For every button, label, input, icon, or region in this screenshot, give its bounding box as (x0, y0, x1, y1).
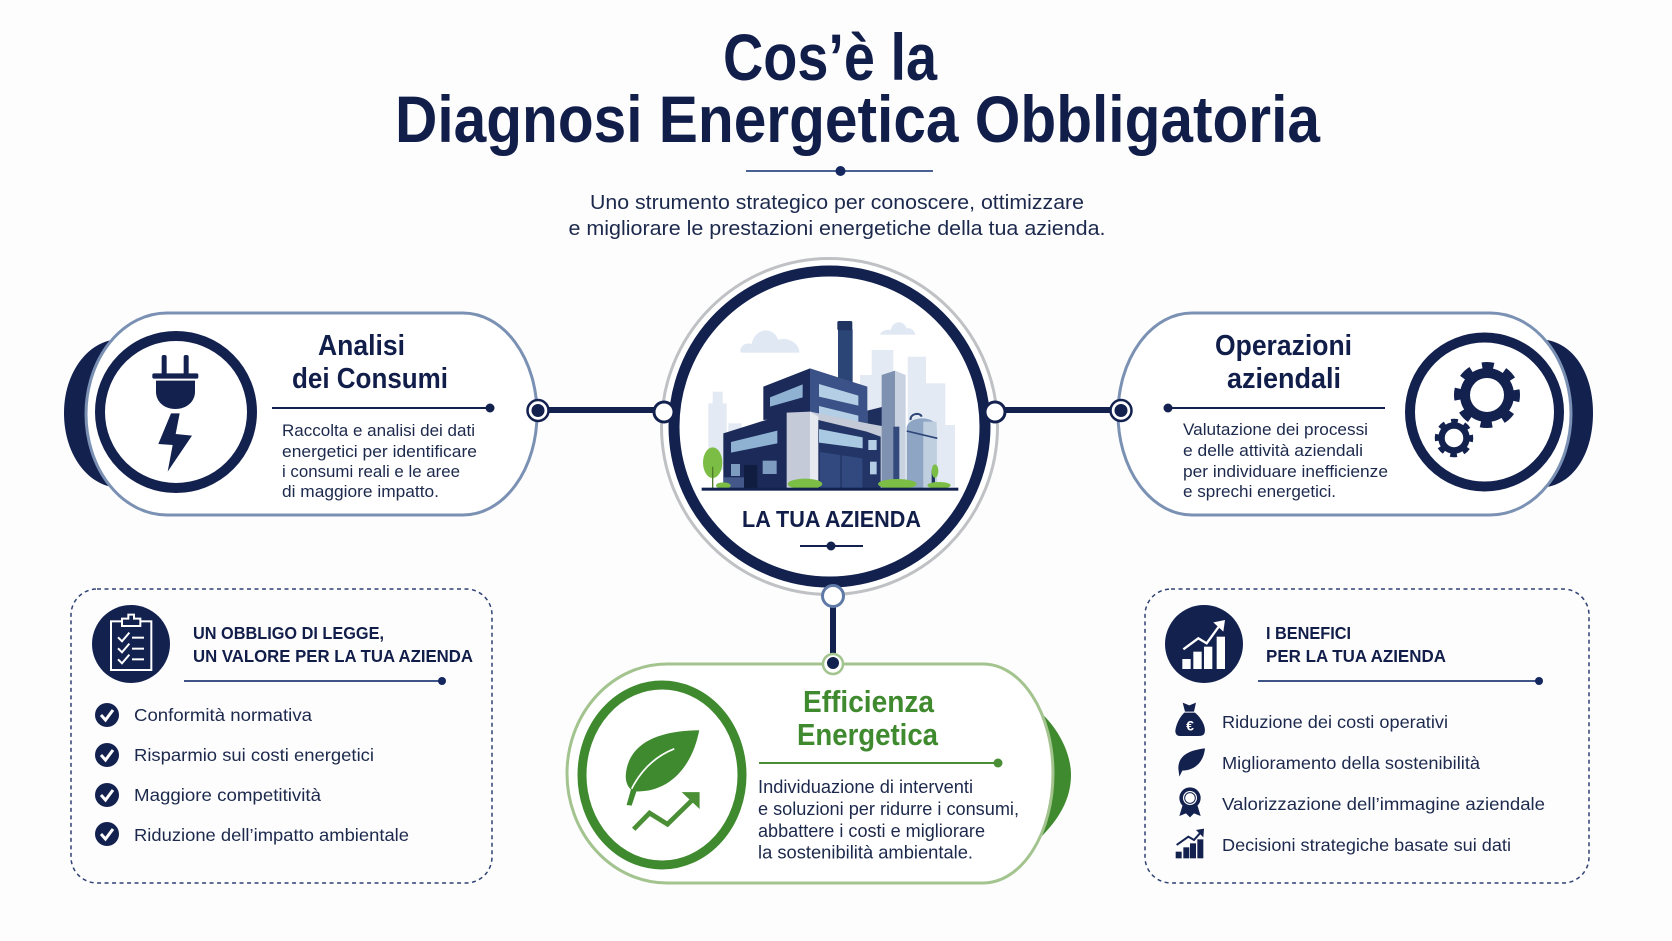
navy ring (674, 271, 985, 582)
list item: Impatto ambientale: Riduzione dell’impatto ambientale (134, 825, 409, 845)
panel: Operazioni aziendali (1118, 313, 1593, 515)
list item: immagine aziendale: Valorizzazione dell’immagine aziendale (1222, 794, 1545, 814)
title: Cos’è la (723, 20, 938, 94)
right crescent (1040, 712, 1071, 838)
greenery (703, 447, 951, 489)
panel heading: PER LA TUA AZIENDA (1266, 646, 1446, 666)
node: right pill connector (1110, 400, 1132, 421)
list item: costi operativi: € (1186, 717, 1194, 733)
list item: Impatto ambientale (95, 822, 409, 846)
panel: Analisi dei Consumi: dei Consumi (292, 363, 448, 395)
pill outline (567, 664, 1053, 883)
node: left pill connector (528, 400, 548, 421)
title divider (746, 166, 933, 176)
list item: costi operativi: Riduzione dei costi operativi (1222, 712, 1448, 732)
icon: leaf and growth arrow (626, 730, 700, 829)
node: top of green pill (823, 654, 843, 674)
list item: Risparmio: Risparmio sui costi energetici (134, 745, 374, 765)
lower left block (723, 413, 787, 488)
pill outline (86, 313, 537, 515)
connector lines (538, 410, 1120, 664)
dashed frame (71, 589, 492, 883)
body text: di maggiore impatto. (282, 483, 439, 501)
clouds (740, 322, 915, 353)
heading: Operazioni (1215, 330, 1352, 362)
back pipe block (867, 407, 883, 488)
body text: e soluzioni per ridurre i consumi, (758, 799, 1019, 819)
node: left of circle (654, 402, 674, 422)
panel heading (193, 623, 473, 666)
body text (758, 777, 1019, 862)
left crescent (64, 340, 112, 487)
icon: clipboard (92, 605, 170, 683)
list item: decisioni strategiche (1176, 829, 1511, 858)
dashed frame (1145, 589, 1589, 883)
body text: per individuare inefficienze (1183, 463, 1388, 481)
subtitle: Uno strumento strategico per conoscere, ottimizzare (590, 191, 1084, 214)
node: bottom of circle (822, 586, 844, 606)
illustration: factory (702, 321, 958, 491)
panel: Efficienza Energetica: Energetica (797, 717, 939, 752)
list item: Conformità normativa (95, 703, 312, 727)
body text (282, 422, 477, 501)
body text: e delle attività aziendali (1183, 442, 1363, 460)
right crescent (1547, 340, 1593, 487)
list item: sostenibilità: Miglioramento della sostenibilità (1222, 753, 1480, 773)
grey front block (787, 412, 889, 488)
ring (1410, 338, 1559, 486)
icon: plug and lightning (152, 355, 198, 472)
icon: growth chart (1165, 605, 1243, 683)
panel: Un obbligo di legge (71, 589, 492, 883)
heading: Analisi (318, 330, 405, 362)
title: Diagnosi Energetica Obbligatoria (395, 82, 1321, 156)
panel heading: I BENEFICI (1266, 623, 1351, 643)
list item: Competitività (95, 783, 321, 807)
tower (882, 371, 895, 488)
outer grey ring (662, 258, 998, 594)
title (395, 20, 1321, 156)
central circle: La tua azienda (662, 258, 998, 594)
heading rule (759, 758, 1002, 768)
node: right of circle (985, 402, 1005, 422)
panel heading (1266, 623, 1446, 666)
heading rule (1258, 677, 1543, 685)
list item: Conformità normativa: Conformità normativa (134, 705, 312, 725)
panel: Analisi dei Consumi (64, 313, 537, 515)
body text (1183, 421, 1388, 501)
pill outline (1118, 313, 1571, 515)
subtitle: e migliorare le prestazioni energetiche della tua azienda. (568, 217, 1106, 240)
heading rule (272, 404, 494, 412)
list item: decisioni strategiche: Decisioni strategiche basate sui dati (1222, 835, 1511, 855)
list item: Risparmio (95, 743, 374, 767)
heading rule (184, 677, 446, 685)
list item: Competitività: Maggiore competitività (134, 785, 321, 805)
ring (100, 336, 252, 488)
body text: Valutazione dei processi (1183, 421, 1368, 439)
body text: Raccolta e analisi dei dati (282, 422, 475, 440)
panel heading: UN OBBLIGO DI LEGGE, (193, 623, 384, 643)
rolling door (820, 452, 862, 488)
body text: la sostenibilità ambientale. (758, 842, 973, 862)
tank (907, 418, 937, 488)
ground line (702, 488, 958, 491)
panel: Efficienza Energetica (567, 664, 1071, 883)
body text: energetici per identificare (282, 443, 477, 461)
list item: costi operativi (1175, 703, 1448, 736)
icon: gears (1434, 361, 1521, 458)
skyline (708, 350, 955, 487)
chimney (838, 329, 853, 383)
subtitle (568, 191, 1106, 240)
center divider (800, 542, 863, 550)
panel: I benefici (1145, 589, 1589, 883)
panel heading: UN VALORE PER LA TUA AZIENDA (193, 646, 473, 666)
body text: e sprechi energetici. (1183, 483, 1336, 501)
list item: immagine aziendale (1179, 787, 1545, 817)
center label: LA TUA AZIENDA (742, 506, 921, 532)
body text: i consumi reali e le aree (282, 463, 460, 481)
panel: Operazioni aziendali: aziendali (1227, 363, 1341, 395)
body text: Individuazione di interventi (758, 777, 973, 797)
list item: sostenibilità (1178, 748, 1480, 777)
oval ring (582, 685, 742, 865)
body text: abbattere i costi e migliorare (758, 821, 985, 841)
heading rule (1164, 404, 1385, 412)
upper block (763, 368, 810, 420)
heading: Efficienza (803, 684, 935, 719)
